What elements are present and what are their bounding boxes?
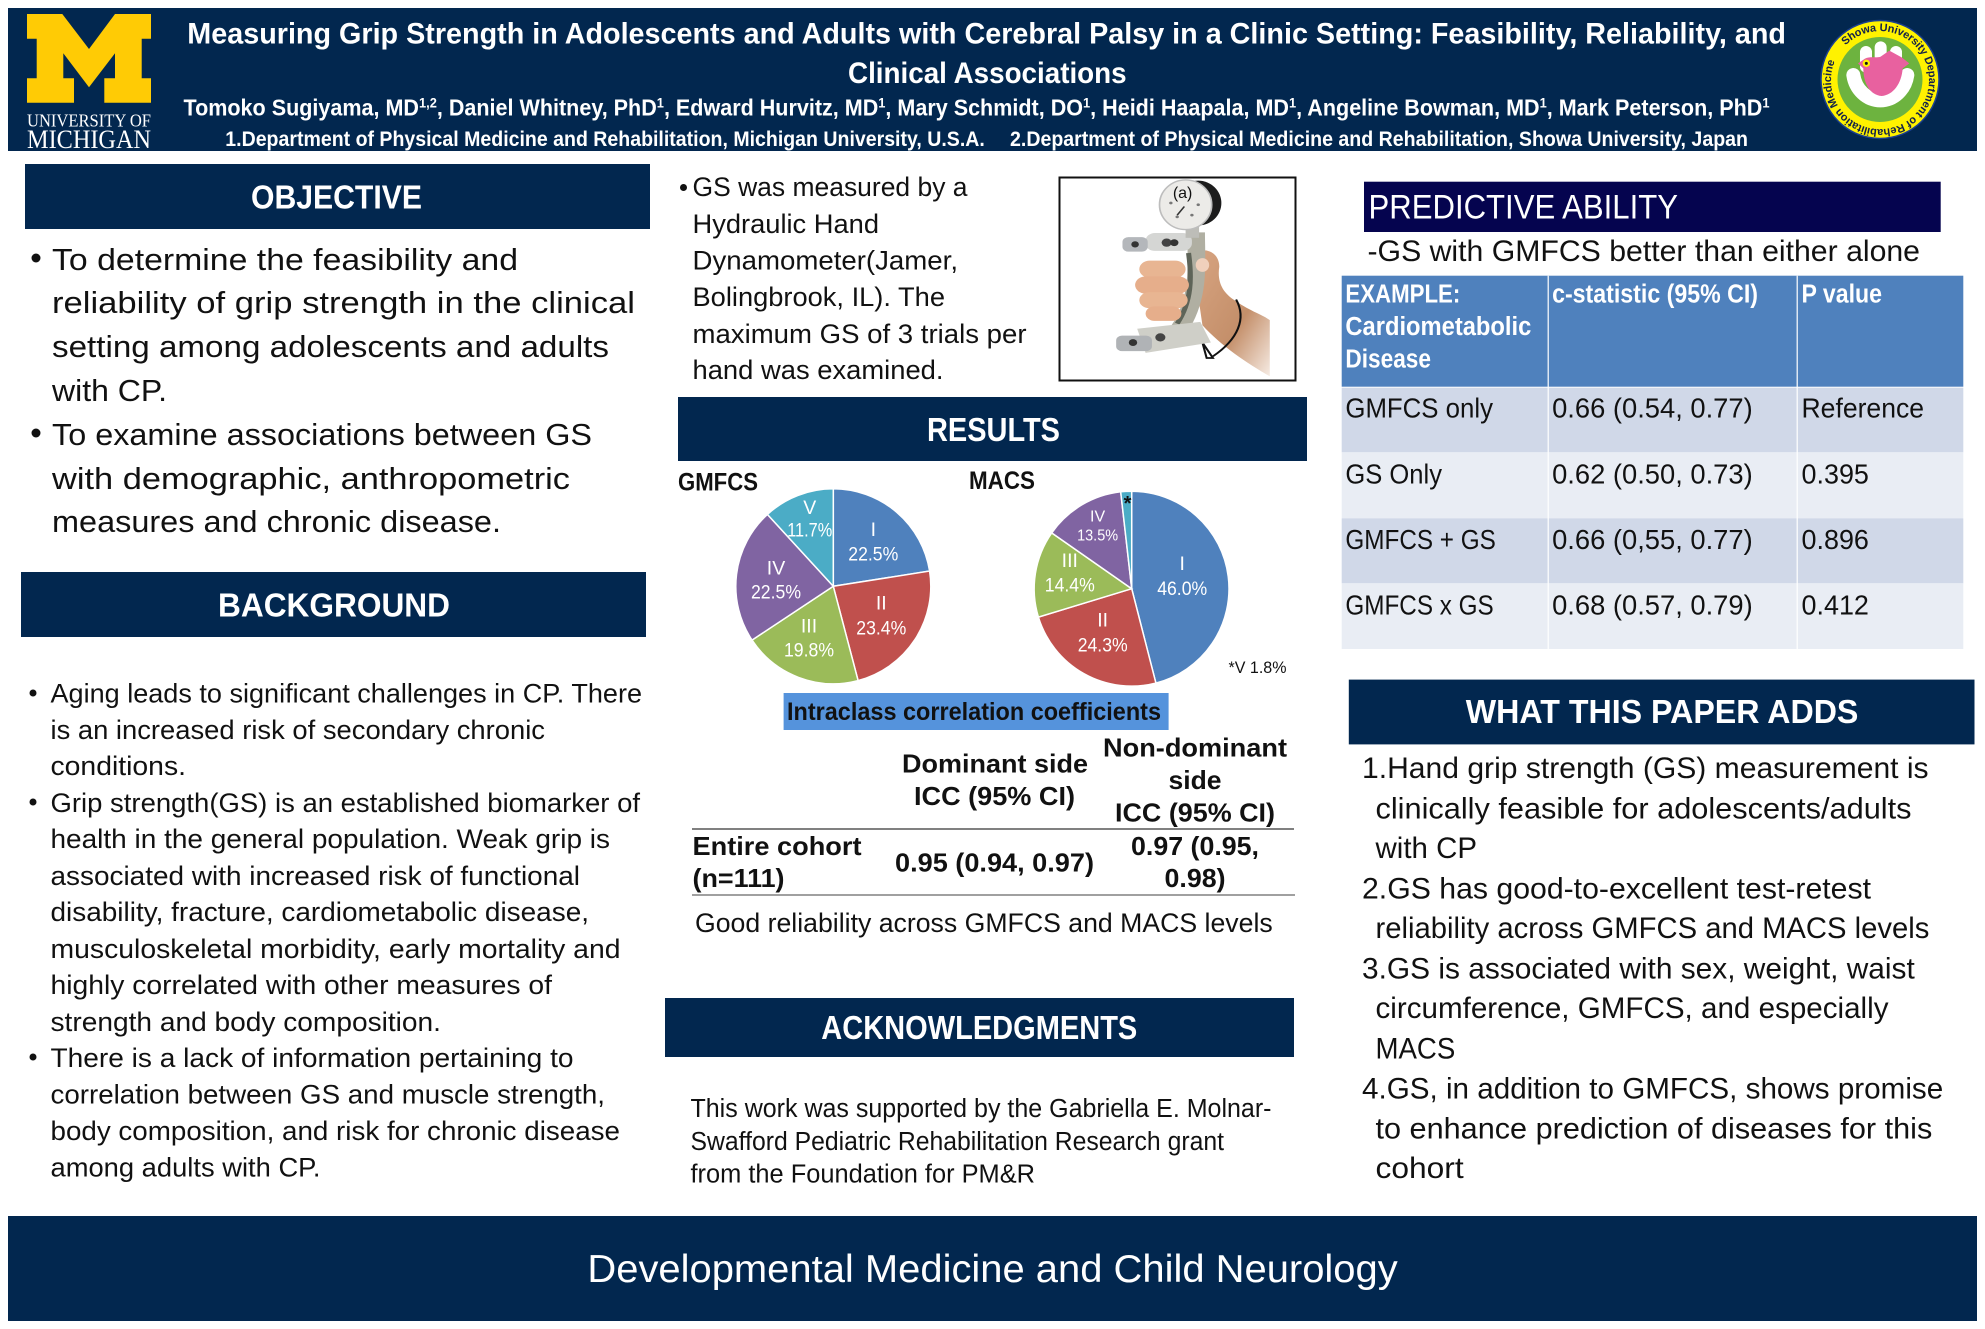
table: c-statistic: GMFCS x GS — [1345, 589, 1494, 620]
affiliations: 1.Department of Physical Medicine and Rehabilitation, Michigan University, U.S.A. — [225, 128, 985, 151]
pie chart: GMFCS: I — [871, 519, 876, 541]
panel: acknowledgments — [665, 998, 1294, 1189]
table: c-statistic: GMFCS only — [1345, 393, 1493, 424]
table: c-statistic: 0.62 (0.50, 0.73) — [1552, 458, 1753, 490]
table: c-statistic — [1342, 276, 1963, 649]
list of findings: 1.Hand grip strength (GS) measurement is — [1362, 752, 1929, 785]
background text: strength and body composition. — [50, 1007, 441, 1037]
background text: There is a lack of information pertaining to — [50, 1043, 574, 1073]
header banner — [8, 8, 1977, 154]
heading: background — [21, 572, 646, 637]
table: c-statistic: GS Only — [1345, 458, 1442, 490]
heading: predictive ability — [1364, 182, 1941, 232]
pie chart: MACS — [969, 467, 1286, 686]
pie chart: GMFCS: GMFCS — [678, 469, 758, 497]
pie chart: MACS: III — [1062, 550, 1078, 572]
background text: among adults with CP. — [50, 1152, 320, 1182]
table: ICC: Non-dominant — [1103, 733, 1287, 763]
University of Michigan logo: MICHIGAN — [27, 125, 151, 154]
list of findings: reliability across GMFCS and MACS levels — [1376, 912, 1929, 945]
table: c-statistic: P value — [1802, 280, 1882, 308]
list of findings — [1362, 752, 1943, 1185]
pie chart: MACS: II — [1097, 610, 1108, 632]
objective text — [32, 242, 635, 539]
text block: grip strength method: Hydraulic Hand — [692, 209, 879, 239]
pie chart: MACS: 46.0% — [1157, 578, 1207, 600]
background text: is an increased risk of secondary chronic — [50, 715, 545, 745]
pie chart: MACS: 24.3% — [1078, 634, 1128, 656]
table: c-statistic: Reference — [1802, 393, 1924, 424]
table: c-statistic: 0.66 (0,55, 0.77) — [1552, 524, 1753, 555]
list of findings: with CP — [1375, 832, 1477, 865]
background text: health in the general population. Weak grip is — [50, 824, 610, 854]
pie chart: GMFCS: 19.8% — [784, 640, 834, 662]
text: reliability note: Good reliability across GMFCS and MACS levels — [695, 908, 1273, 938]
heading: intraclass correlation coefficients: Intraclass correlation coefficients — [787, 698, 1161, 726]
heading: objective — [25, 164, 650, 229]
objective text: measures and chronic disease. — [52, 504, 501, 539]
footer banner: journal name — [8, 1216, 1977, 1321]
list of findings: clinically feasible for adolescents/adults — [1376, 792, 1912, 825]
pie chart: MACS: MACS — [969, 467, 1035, 495]
background text: disability, fracture, cardiometabolic disease, — [50, 897, 589, 927]
panel: background — [21, 572, 646, 1182]
list of findings: to enhance prediction of diseases for this — [1376, 1113, 1932, 1146]
table: ICC: ICC (95% CI) — [1115, 798, 1275, 828]
pie chart: GMFCS: II — [876, 592, 887, 614]
text block: grip strength method: GS was measured by a — [692, 172, 968, 202]
table: ICC: ICC (95% CI) — [914, 781, 1075, 811]
University of Michigan logo: UNIVERSITY OF — [27, 111, 151, 131]
heading: acknowledgments: ACKNOWLEDGMENTS — [821, 1010, 1137, 1047]
heading: results: RESULTS — [927, 412, 1060, 449]
table: ICC: Dominant side — [902, 749, 1088, 779]
heading: what this paper adds: WHAT THIS PAPER ADDS — [1466, 694, 1858, 731]
background text: associated with increased risk of functional — [50, 861, 580, 891]
pie chart: GMFCS: III — [801, 616, 817, 638]
title: Clinical Associations — [848, 57, 1127, 90]
acknowledgments text: This work was supported by the Gabriella E. Molnar- — [690, 1095, 1272, 1123]
background text: musculoskeletal morbidity, early mortality and — [50, 934, 620, 964]
list of findings: circumference, GMFCS, and especially — [1376, 992, 1889, 1025]
table: c-statistic: Disease — [1345, 345, 1431, 373]
panel: what this paper adds — [1349, 680, 1974, 1185]
heading: objective: OBJECTIVE — [251, 180, 422, 216]
heading: results — [678, 397, 1307, 461]
objective text: with CP. — [51, 373, 167, 408]
acknowledgments text — [690, 1095, 1272, 1189]
pie chart: GMFCS: V — [803, 497, 816, 519]
pie chart: MACS: I — [1179, 553, 1185, 575]
list of findings: 4.GS, in addition to GMFCS, shows promise — [1362, 1072, 1943, 1105]
background text: highly correlated with other measures of — [50, 970, 553, 1000]
background text: body composition, and risk for chronic disease — [50, 1116, 620, 1146]
pie chart: GMFCS: 22.5% — [848, 544, 898, 566]
title: Measuring Grip Strength in Adolescents and Adults with Cerebral Palsy in a Clinic Setting: Feasibility, Reliability, and — [187, 17, 1786, 50]
list of findings: 2.GS has good-to-excellent test-retest — [1362, 872, 1872, 905]
list of findings: MACS — [1376, 1032, 1455, 1065]
text block: grip strength method: maximum GS of 3 trials per — [692, 319, 1027, 349]
pie chart: GMFCS — [678, 469, 931, 684]
background text: conditions. — [50, 751, 186, 781]
table: c-statistic: 0.66 (0.54, 0.77) — [1552, 393, 1753, 424]
heading: what this paper adds — [1349, 680, 1974, 744]
table: ICC: 0.95 (0.94, 0.97) — [895, 848, 1094, 878]
objective text: with demographic, anthropometric — [51, 461, 570, 496]
objective text: setting among adolescents and adults — [52, 329, 609, 364]
text block: grip strength method: Dynamometer(Jamer, — [692, 246, 958, 276]
pie chart: MACS: IV — [1090, 508, 1105, 526]
table: ICC: Entire cohort — [692, 831, 862, 861]
title — [187, 17, 1786, 90]
authors: Tomoko Sugiyama, MD1,2, Daniel Whitney, PhD1, Edward Hurvitz, MD1, Mary Schmidt, DO1, Heidi Haapala, MD1, Angeline Bowman, MD1, Mark Peterson, PhD1 — [184, 95, 1770, 121]
table: ICC: (n=111) — [692, 863, 784, 893]
University of Michigan logo — [27, 14, 151, 154]
text: predictive subtitle: -GS with GMFCS better than either alone — [1368, 235, 1920, 268]
pie chart: MACS: * — [1124, 493, 1132, 515]
background text: correlation between GS and muscle strength, — [50, 1080, 605, 1110]
table: ICC: side — [1168, 765, 1222, 795]
background text: Aging leads to significant challenges in CP. There — [50, 678, 642, 708]
pie chart: GMFCS: 11.7% — [787, 520, 832, 542]
table: c-statistic: EXAMPLE: — [1345, 280, 1460, 308]
Showa University logo: Showa University Department of Rehabilitation Medicine — [1823, 23, 1936, 137]
objective text: reliability of grip strength in the clinical — [52, 285, 635, 320]
affiliations: 2.Department of Physical Medicine and Rehabilitation, Showa University, Japan — [1010, 128, 1748, 151]
table: c-statistic: c-statistic (95% CI) — [1552, 280, 1758, 308]
list of findings: 3.GS is associated with sex, weight, waist — [1362, 952, 1916, 986]
pie chart: GMFCS: IV — [767, 557, 785, 579]
text block: grip strength method — [680, 172, 1027, 385]
background text — [30, 678, 642, 1182]
table: ICC — [692, 733, 1295, 896]
heading: acknowledgments — [665, 998, 1294, 1057]
table: c-statistic: Cardiometabolic — [1345, 313, 1531, 341]
pie chart: MACS: *V 1.8% — [1228, 658, 1286, 677]
figure: hand dynamometer photo: (a) — [1173, 185, 1192, 202]
text block: grip strength method: Bolingbrook, IL). The — [692, 282, 945, 312]
objective text: To examine associations between GS — [52, 417, 592, 452]
figure: hand dynamometer photo — [1060, 178, 1296, 380]
panel: results — [678, 397, 1307, 938]
table: c-statistic: 0.896 — [1802, 524, 1869, 555]
acknowledgments text: Swafford Pediatric Rehabilitation Research grant — [690, 1128, 1224, 1156]
list of findings: cohort — [1376, 1152, 1464, 1185]
acknowledgments text: from the Foundation for PM&R — [690, 1161, 1035, 1189]
text block: grip strength method: hand was examined. — [692, 355, 944, 385]
panel: predictive ability — [1342, 182, 1963, 649]
footer banner: journal name: Developmental Medicine and Child Neurology — [587, 1248, 1398, 1291]
pie chart: GMFCS: 22.5% — [751, 582, 801, 604]
heading: background: BACKGROUND — [218, 588, 450, 624]
background text: Grip strength(GS) is an established biomarker of — [50, 788, 641, 818]
table: c-statistic: 0.412 — [1802, 589, 1869, 620]
pie chart: MACS: 14.4% — [1045, 575, 1095, 597]
table: c-statistic: 0.68 (0.57, 0.79) — [1552, 589, 1753, 620]
objective text: To determine the feasibility and — [52, 242, 518, 277]
heading: predictive ability: PREDICTIVE ABILITY — [1368, 188, 1678, 226]
affiliations — [225, 128, 1748, 151]
table: ICC: 0.98) — [1164, 863, 1226, 893]
panel: objective — [25, 164, 650, 539]
pie chart: MACS: 13.5% — [1077, 528, 1118, 545]
table: ICC: 0.97 (0.95, — [1131, 831, 1259, 861]
table: c-statistic: GMFCS + GS — [1345, 524, 1496, 555]
table: c-statistic: 0.395 — [1802, 458, 1869, 490]
pie chart: GMFCS: 23.4% — [856, 617, 906, 639]
